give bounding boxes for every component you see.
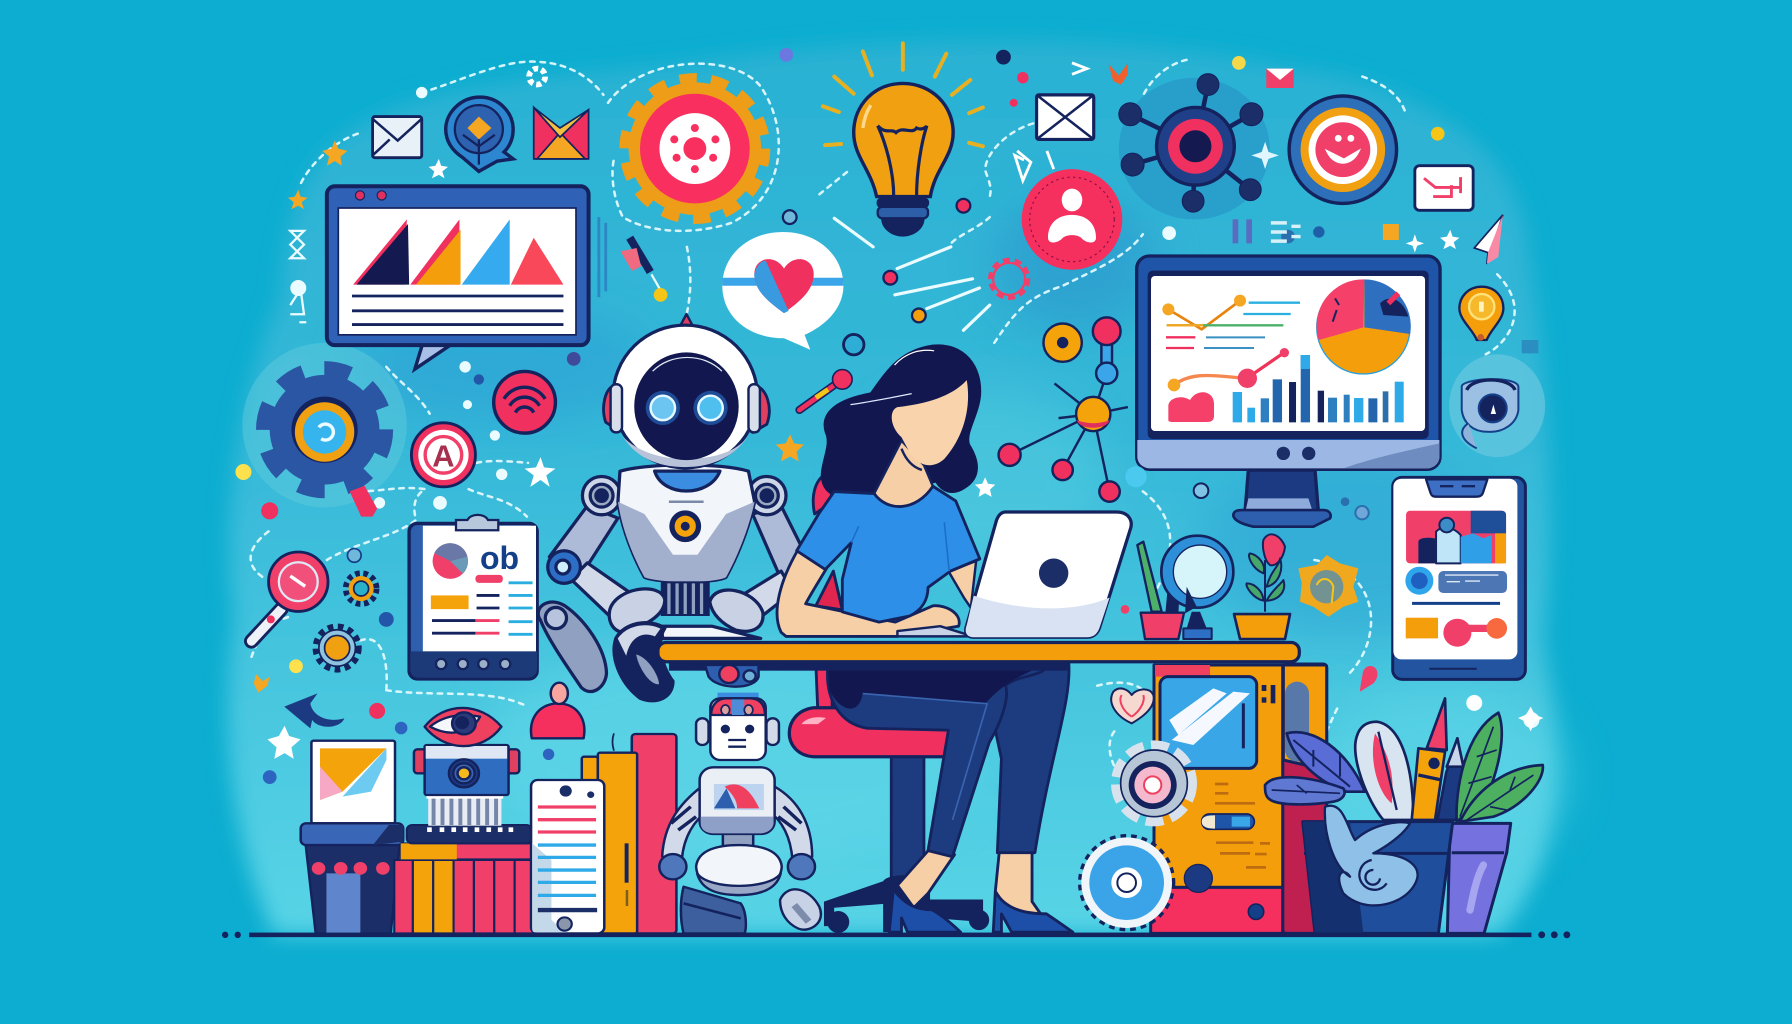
small white star (975, 477, 995, 497)
chair base and post (824, 755, 989, 933)
icon: wifi badge (494, 371, 555, 433)
pink book (632, 734, 676, 933)
small robot torso (700, 767, 775, 834)
camera robot body (414, 745, 519, 795)
woman hair (822, 346, 980, 501)
large white-blue cog (1080, 836, 1173, 929)
panel: desktop monitor dashboard (1121, 256, 1538, 679)
small heart icon (1111, 688, 1154, 723)
picture frame (311, 741, 395, 823)
icon: pink person badge (1022, 169, 1122, 270)
golden badge (1298, 555, 1358, 617)
lock icon (1462, 379, 1518, 448)
icon: badge diamond (446, 97, 513, 171)
icon: pink envelope small (1266, 69, 1294, 88)
woman neck and face (874, 441, 933, 507)
decorative dots (1121, 466, 1369, 614)
desk plant (1234, 534, 1290, 639)
icon: letter A badge: A (432, 438, 455, 473)
icon: paint brush (621, 238, 667, 302)
woman near leg (827, 664, 1046, 857)
cluster: bottom-left objects (284, 665, 821, 933)
woman shoes (889, 889, 1073, 932)
woman far leg (981, 663, 1069, 853)
woman far arm (948, 561, 976, 608)
plant pot (1303, 822, 1511, 933)
cloud shape (1168, 392, 1214, 422)
monitor stand (1245, 470, 1318, 512)
dashed connector paths (251, 59, 1515, 790)
icon: clipboard document (409, 515, 537, 679)
woman calves (897, 849, 1046, 922)
turn arrow (284, 693, 344, 728)
robot shoulders (582, 476, 786, 515)
cabinet window (1160, 677, 1257, 768)
pink person icon (531, 683, 584, 738)
small ring (844, 334, 864, 355)
chair seat (789, 708, 952, 757)
small robot head (696, 718, 709, 745)
icon: orange gear with pink centre (625, 79, 765, 218)
antenna (680, 314, 693, 326)
icon: magnifier (251, 552, 328, 641)
swirl ornament (1325, 806, 1418, 905)
orange star (776, 434, 804, 461)
document sheet (531, 780, 604, 933)
icon: envelope left (373, 117, 422, 158)
icon: large navy gear (266, 371, 383, 517)
small robot pelvis (723, 833, 753, 847)
robot head (604, 325, 769, 468)
camera robot grill (426, 795, 503, 826)
scene: robot and woman at desk (538, 314, 1299, 933)
icon: smiley target (1289, 96, 1397, 203)
icon: light bulb (823, 43, 983, 237)
cog with pink centre (1117, 746, 1191, 821)
icon: top-left browser chart panel (327, 186, 589, 369)
decorative dots and stars (235, 48, 1539, 784)
small robot arms (662, 787, 709, 860)
icon: small gears (315, 574, 376, 670)
ground line (222, 931, 1570, 938)
desk pencil cup (1137, 542, 1184, 639)
woman shirt (797, 486, 980, 622)
line chart lower (1168, 348, 1289, 391)
icon: network hub (1119, 74, 1263, 212)
robot hips and legs (609, 589, 763, 701)
robot left arm (538, 506, 634, 692)
cabinet toggle (1202, 814, 1254, 829)
icon: paper plane (1474, 215, 1503, 264)
monitor screen (1151, 276, 1425, 431)
plant leaves and tools (1265, 698, 1543, 822)
robot right arm (728, 506, 806, 628)
pie chart (1317, 279, 1411, 374)
woman near arm (777, 551, 959, 636)
desk magnifying glass (1161, 536, 1233, 639)
eye icon (425, 708, 501, 746)
monitor casing (1137, 256, 1440, 469)
orange books (582, 753, 637, 933)
cluster: bottom-right cabinet and plant pot (1080, 664, 1543, 933)
icon: envelope centre (1037, 95, 1094, 139)
bar chart (1233, 355, 1404, 422)
icon: heart speech bubble (722, 232, 843, 350)
background blob (228, 41, 1566, 935)
icon: folded M shape (534, 107, 589, 159)
icon: clipboard document: ob (480, 540, 519, 576)
small robot tracks (681, 887, 746, 933)
waste cup (301, 823, 403, 933)
marker icon (799, 370, 852, 410)
line chart upper (1162, 295, 1300, 348)
robot neck (655, 471, 720, 491)
robot waist (661, 581, 710, 616)
icon: letter A badge (411, 423, 475, 487)
pink striped drawers (394, 825, 534, 933)
phone (1393, 477, 1525, 679)
molecule diagram (999, 317, 1128, 502)
icon: small settings gear (529, 69, 545, 85)
icon: card (1415, 166, 1473, 210)
chair back (813, 472, 842, 712)
ground sparkles (1467, 696, 1543, 731)
small robot antenna cluster (705, 665, 759, 695)
small robot (659, 665, 821, 933)
small cross shape (1522, 340, 1538, 353)
icon: pink ring gear (991, 261, 1027, 297)
decorative rays (834, 218, 990, 330)
desk top (658, 643, 1299, 662)
location pin bulb (1459, 287, 1503, 341)
small location pin (1360, 666, 1377, 692)
cabinet (1151, 664, 1327, 933)
laptop (897, 512, 1131, 637)
robot torso (618, 465, 755, 582)
